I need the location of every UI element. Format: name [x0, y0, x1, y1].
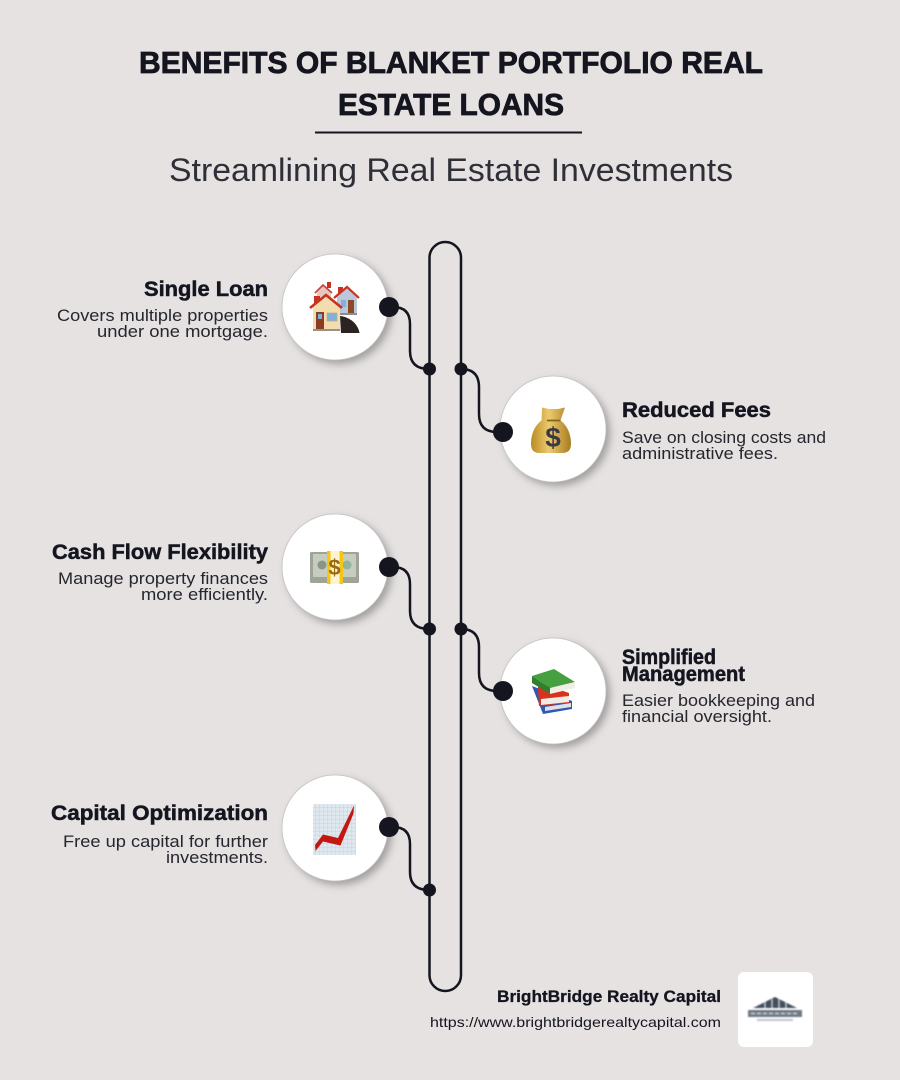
icon: banknotes: $ [328, 555, 341, 580]
description: capital optimization [63, 833, 269, 867]
heading: simplified management: Management [622, 663, 745, 686]
heading: simplified management: Simplified [622, 646, 716, 669]
heading: reduced fees: Reduced Fees [622, 399, 771, 422]
panel: cash flow flexibility [52, 514, 436, 636]
description: cash flow flexibility: more efficiently. [141, 586, 268, 604]
description: reduced fees [622, 429, 826, 463]
description: reduced fees: administrative fees. [622, 445, 778, 463]
connector: capital optimization [379, 817, 436, 896]
description: simplified management [622, 692, 815, 726]
description: single loan [57, 307, 268, 341]
icon: books [500, 638, 610, 748]
heading: capital optimization: Capital Optimization [51, 802, 268, 825]
footer: company name: BrightBridge Realty Capital [497, 987, 721, 1006]
description: cash flow flexibility: Manage property finances [58, 570, 268, 588]
connector: cash flow flexibility [379, 557, 436, 636]
logo [738, 972, 813, 1047]
connector: reduced fees [454, 362, 513, 442]
heading: simplified management [622, 646, 745, 686]
title: ESTATE LOANS [338, 87, 564, 122]
description: single loan: under one mortgage. [97, 323, 268, 341]
description: simplified management: financial oversight. [622, 708, 772, 726]
panel: reduced fees [454, 362, 826, 486]
panel: simplified management [454, 622, 815, 748]
icon: money bag [500, 376, 610, 486]
connector: simplified management [454, 622, 513, 701]
icon: rising chart [282, 775, 392, 885]
icon: houses [282, 254, 392, 364]
title: BENEFITS OF BLANKET PORTFOLIO REAL [139, 45, 763, 80]
description: capital optimization: investments. [166, 849, 268, 867]
description: reduced fees: Save on closing costs and [622, 429, 826, 447]
description: simplified management: Easier bookkeeping and [622, 692, 815, 710]
panel: capital optimization [51, 775, 436, 896]
description: capital optimization: Free up capital for further [63, 833, 269, 851]
title [139, 45, 763, 122]
icon: money bag: $ [545, 422, 561, 453]
description: single loan: Covers multiple properties [57, 307, 268, 325]
subtitle: Streamlining Real Estate Investments [169, 152, 733, 188]
central timeline track [430, 242, 461, 991]
panel: single loan [57, 254, 436, 376]
icon: banknotes [282, 514, 392, 624]
heading: single loan: Single Loan [144, 278, 268, 301]
connector: single loan [379, 297, 436, 376]
heading: cash flow flexibility: Cash Flow Flexibility [52, 541, 268, 564]
description: cash flow flexibility [58, 570, 268, 604]
footer: website url: https://www.brightbridgerealtycapital.com [430, 1014, 721, 1030]
